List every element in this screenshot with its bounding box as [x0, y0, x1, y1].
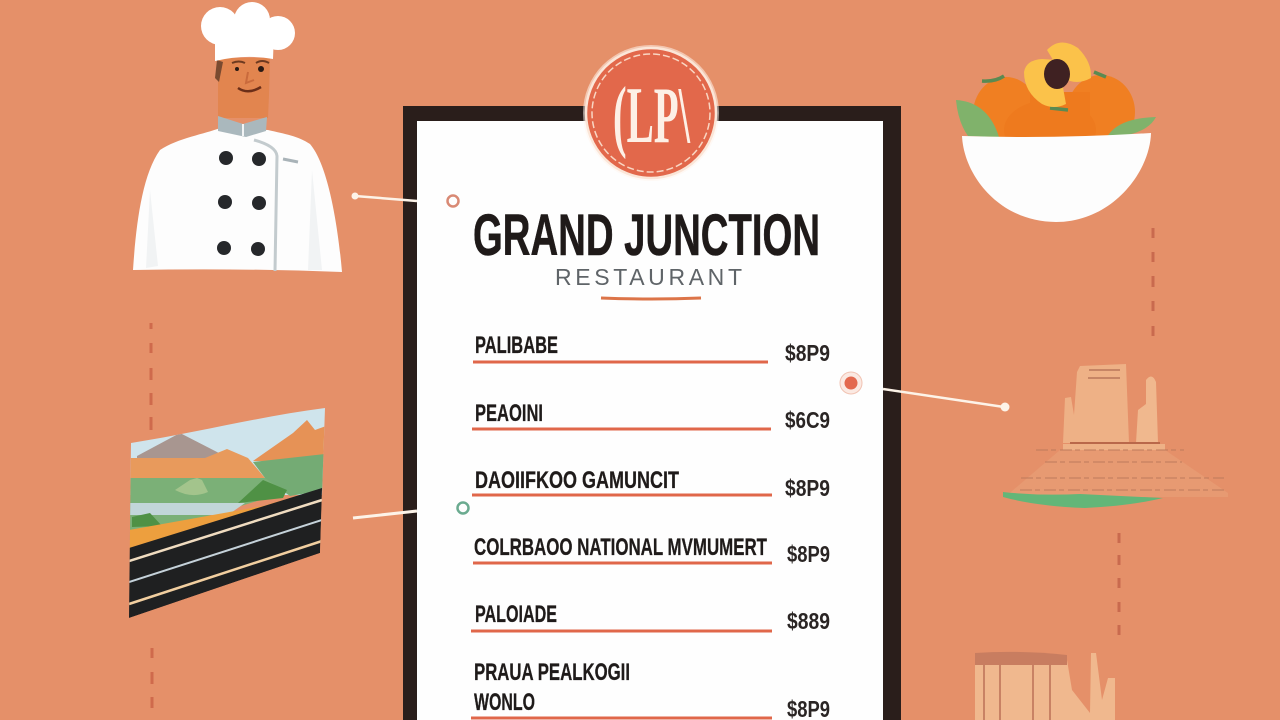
menu item 3	[472, 467, 830, 501]
butte grass	[1003, 492, 1163, 508]
bushes	[175, 478, 208, 495]
meadow	[130, 478, 274, 540]
river	[129, 503, 245, 515]
butte slope layers	[1005, 450, 1228, 497]
chef placket	[254, 140, 277, 271]
menu item 3: $8P9	[785, 475, 830, 501]
dashed connector: bowl to butte	[1152, 228, 1154, 336]
marker: green ring	[458, 502, 468, 514]
menu item 1: PALIBABE	[475, 332, 558, 359]
cut peach	[1047, 42, 1091, 82]
icon: peach bowl	[956, 42, 1156, 222]
mountains	[137, 434, 218, 458]
sky	[125, 405, 330, 495]
dashed connector: chef to road	[150, 323, 152, 430]
menu item 5: PALOIADE	[475, 601, 557, 628]
chef buttons	[217, 151, 266, 256]
icon: mesa butte	[1003, 364, 1228, 508]
chef collar	[218, 116, 267, 137]
bowl	[962, 133, 1151, 222]
menu item 4: $8P9	[787, 541, 830, 567]
marker: red dot	[840, 372, 862, 394]
title: GRAND JUNCTION	[473, 203, 820, 268]
leaves	[956, 100, 1156, 137]
chef hat	[201, 2, 295, 61]
subtitle: RESTAURANT	[555, 264, 742, 290]
menu paper	[417, 121, 883, 720]
icon: canyon columns	[975, 652, 1115, 720]
chef neck and face	[218, 58, 270, 118]
ground	[129, 496, 296, 550]
menu item 6	[471, 659, 830, 720]
peaches	[974, 75, 1135, 137]
menu item 2	[472, 400, 830, 433]
title underline	[601, 298, 701, 299]
stems	[982, 72, 1106, 110]
menu item 6: WONLO	[474, 689, 535, 716]
connector: road to menu	[353, 511, 417, 518]
menu item 1	[473, 332, 830, 366]
menu item 3: DAOIIFKOO GAMUNCIT	[475, 467, 679, 494]
road	[129, 488, 322, 618]
icon: landscape with road	[125, 405, 330, 618]
menu item 5: $889	[787, 608, 830, 634]
connector: menu to butte	[883, 389, 1010, 412]
emblem seal	[583, 45, 719, 181]
menu item 2: $6C9	[785, 407, 830, 433]
butte towers	[1063, 364, 1129, 443]
menu item 5	[471, 601, 830, 634]
menu frame	[403, 106, 901, 720]
connector: chef to menu	[352, 192, 417, 201]
menu item 2: PEAOINI	[475, 400, 543, 427]
menu item 1: $8P9	[785, 340, 830, 366]
dashed connector: butte to canyon	[1118, 533, 1120, 635]
marker: red ring	[448, 196, 458, 206]
emblem monogram: (LP\	[613, 72, 691, 160]
menu item 6: PRAUA PEALKOGII	[474, 659, 630, 686]
menu item 4: COLRBAOO NATIONAL MVMUMERT	[474, 534, 767, 561]
icon: chef	[133, 2, 342, 272]
chef jacket	[133, 128, 342, 272]
dashed connector: road downward	[150, 648, 154, 708]
butte strata	[1020, 450, 1226, 490]
menu card	[403, 106, 901, 720]
